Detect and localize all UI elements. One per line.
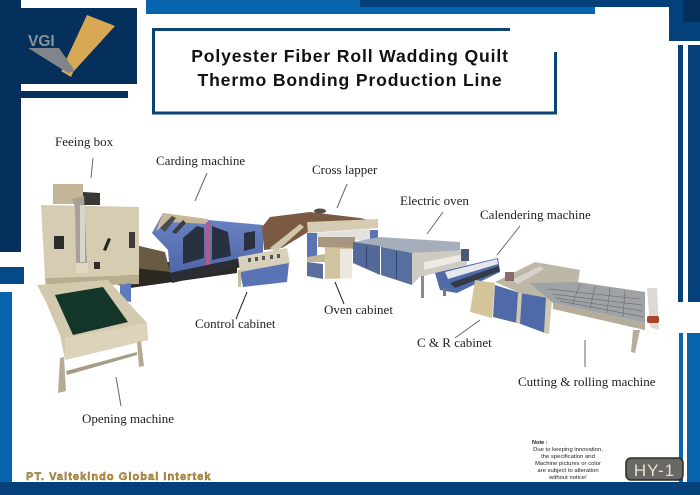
- machine: cross lapper: [262, 208, 378, 258]
- label: C & R cabinet: C & R cabinet: [417, 335, 492, 350]
- label: Carding machine: [156, 153, 245, 201]
- note text: without notice!: [548, 475, 587, 481]
- model badge: [626, 458, 683, 480]
- note text: the specification and: [541, 454, 595, 460]
- label: Cutting & rolling machine: Cutting & rolling machine: [518, 374, 656, 389]
- label: Calendering machine: Calendering machine: [480, 207, 591, 222]
- label: Cutting & rolling machine: [518, 340, 656, 389]
- company name: PT. Valtekindo Global Intertek: [26, 471, 212, 483]
- machine: electric oven: [353, 237, 469, 298]
- label: Cross lapper: [312, 162, 378, 208]
- label: Electric oven: Electric oven: [400, 193, 469, 208]
- logo: VGI: [21, 8, 137, 84]
- label: Opening machine: Opening machine: [82, 411, 174, 426]
- machine: cutting and rolling conveyor: [530, 282, 659, 353]
- label: Opening machine: [82, 377, 174, 426]
- label: Feeing box: Feeing box: [55, 134, 114, 149]
- model badge: HY-1: [634, 461, 675, 480]
- machine: feeding box: [41, 184, 139, 287]
- machine: oven cabinet: [307, 237, 355, 279]
- label: Control cabinet: Control cabinet: [195, 316, 276, 331]
- label: Oven cabinet: [324, 282, 393, 317]
- note text: Machine pictures or color: [535, 461, 601, 467]
- machine: opening machine: [37, 280, 148, 393]
- title box: Polyester Fiber Roll Wadding Quilt: [191, 46, 509, 66]
- label: Control cabinet: [195, 292, 276, 331]
- note text: Due to keeping innovation,: [533, 447, 603, 453]
- label: Calendering machine: [480, 207, 591, 255]
- note text: Note :: [532, 440, 548, 446]
- note text: are subject to alteration: [537, 468, 599, 474]
- label: Feeing box: [55, 134, 114, 178]
- label: Electric oven: [400, 193, 469, 234]
- label: Carding machine: Carding machine: [156, 153, 245, 168]
- machine: carding machine: [152, 213, 263, 283]
- machine: floor shadow and feed conveyor: [118, 245, 237, 288]
- title box: Thermo Bonding Production Line: [197, 70, 503, 90]
- note text: [532, 440, 603, 481]
- machine: calender: [435, 258, 500, 296]
- label: Oven cabinet: Oven cabinet: [324, 302, 393, 317]
- machine: C and R cabinet with cutter: [470, 262, 580, 334]
- label: C & R cabinet: [417, 320, 492, 350]
- title box: [154, 30, 556, 113]
- label: Cross lapper: Cross lapper: [312, 162, 378, 177]
- machine: control cabinet: [238, 248, 290, 287]
- logo: VGI: VGI: [28, 33, 55, 50]
